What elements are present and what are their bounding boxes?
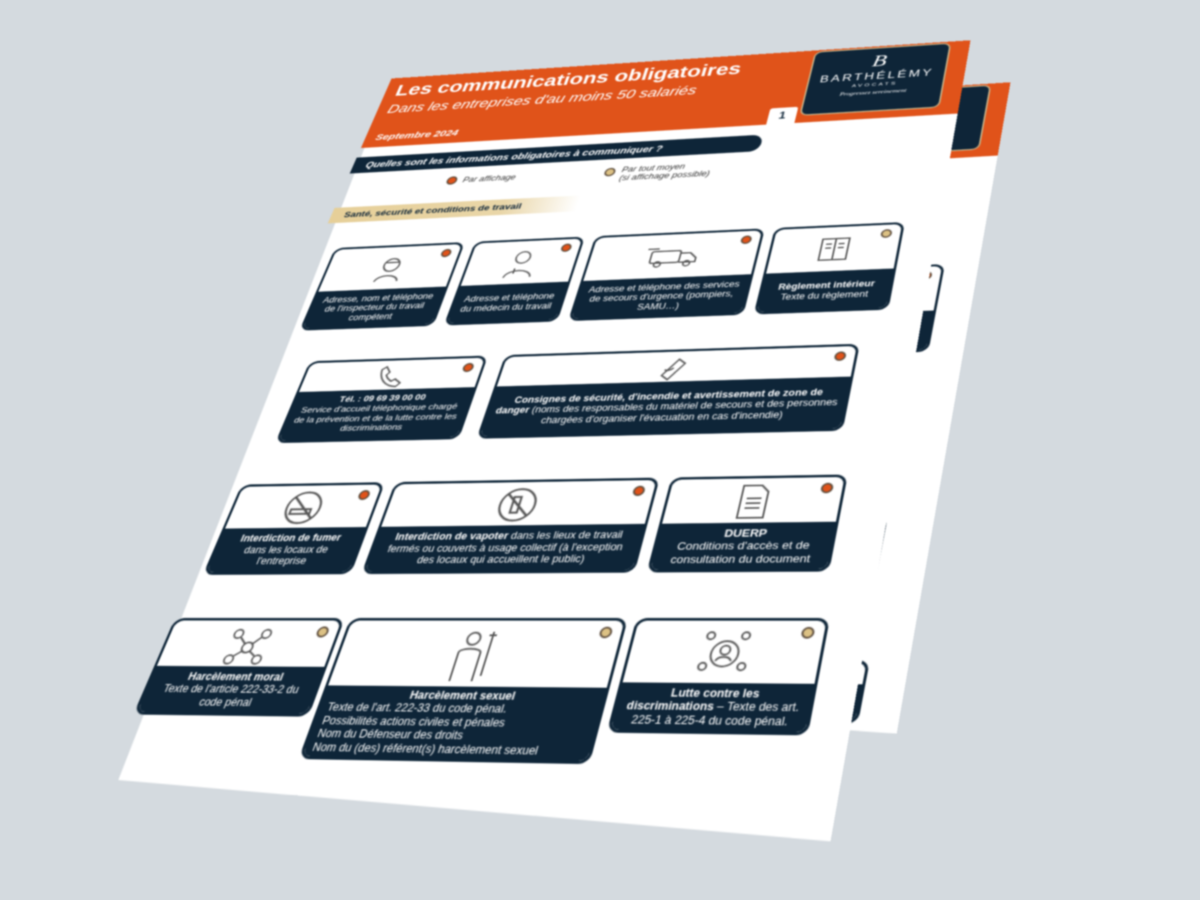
logo: AVOCATS <box>851 80 898 88</box>
card: harcèlement sexuel: Possibilités actions civiles et pénales <box>320 714 507 729</box>
card: DUERP: DUERP <box>723 526 768 539</box>
card: règlement <box>754 222 905 314</box>
header band <box>361 40 971 148</box>
logo: Progressez sereinement <box>839 87 907 97</box>
card: harcèlement moral <box>133 618 345 717</box>
card: médecin <box>444 237 585 325</box>
card: harcèlement moral: Harcèlement moral <box>186 670 285 683</box>
section banner <box>328 195 581 223</box>
card: téléphone discriminations: Tél. : 09 69 39 00 00 <box>338 393 427 404</box>
card: harcèlement sexuel: Nom du Défenseur des droits <box>316 727 465 742</box>
card: médecin: Adresse et téléphone du médecin du travail <box>459 291 556 313</box>
card: secours <box>568 228 765 321</box>
card: DUERP: Conditions d'accès et de consultation du document <box>669 539 811 566</box>
card: harcèlement sexuel: Nom du (des) référent(s) harcèlement sexuel <box>311 740 540 757</box>
card: téléphone discriminations: Service d'accueil téléphonique chargé de la prévention et de la lutte contre les discriminations <box>292 402 459 433</box>
card: discriminations <box>607 618 830 735</box>
logo: BARTHÉLÉMY <box>819 67 935 85</box>
card: harcèlement sexuel <box>298 618 628 764</box>
legend: Par tout moyen <box>621 162 686 174</box>
legend <box>445 162 711 186</box>
page tab <box>766 107 798 125</box>
card: règlement: Texte du règlement <box>779 289 869 302</box>
date: Septembre 2024 <box>374 128 460 142</box>
card: consignes de sécurité: Consignes de sécurité, d'incendie et avertissement de zone de danger (noms des responsables du matériel de secours et des personnes chargées d'organiser l'évacuation en cas d'incendie) <box>494 387 839 425</box>
card: inspecteur: Adresse, nom et téléphone de l'inspecteur du travail compétent <box>321 291 435 322</box>
card: règlement: Règlement intérieur <box>777 279 876 292</box>
card: interdiction de fumer <box>203 482 385 575</box>
card: inspecteur <box>299 242 465 331</box>
logo <box>799 43 951 116</box>
subtitle: Dans les entreprises d'au moins 50 salariés <box>385 83 699 116</box>
card: interdiction de fumer: Interdiction de fumer <box>239 532 343 544</box>
question pill: Quelles sont les informations obligatoires à communiquer ? <box>364 144 664 169</box>
card: harcèlement sexuel: Texte de l'art. 222-33 du code pénal. <box>325 701 509 716</box>
legend: (si affichage possible) <box>618 169 711 183</box>
page tab: 1 <box>777 111 787 121</box>
card: consignes de sécurité <box>476 344 860 439</box>
section banner: Santé, sécurité et conditions de travail <box>342 201 523 219</box>
card: secours: Adresse et téléphone des services de secours d'urgence (pompiers, SAMU…) <box>588 279 741 312</box>
card: discriminations: Lutte contre les discriminations – Texte des art. 225-1 à 225-4 du code pénal. <box>625 686 801 728</box>
back sheet <box>850 82 1012 734</box>
card: interdiction de fumer: dans les locaux de l'entreprise <box>242 544 330 567</box>
logo: B <box>871 51 889 70</box>
card: harcèlement moral: Texte de l'article 222-33-2 du code pénal <box>161 683 301 708</box>
card: interdiction de vapoter <box>361 478 660 574</box>
card: DUERP <box>647 474 848 573</box>
question pill <box>350 135 764 174</box>
card: interdiction de vapoter: Interdiction de vapoter dans les lieux de travail fermés ou couverts à usage collectif (à l'exception des locaux qui accueillent le public) <box>386 529 624 566</box>
front sheet <box>118 40 972 842</box>
card: téléphone discriminations <box>275 356 488 443</box>
title: Les communications obligatoires <box>392 60 744 100</box>
card: harcèlement sexuel: Harcèlement sexuel <box>408 689 517 703</box>
legend: Par affichage <box>461 173 517 184</box>
